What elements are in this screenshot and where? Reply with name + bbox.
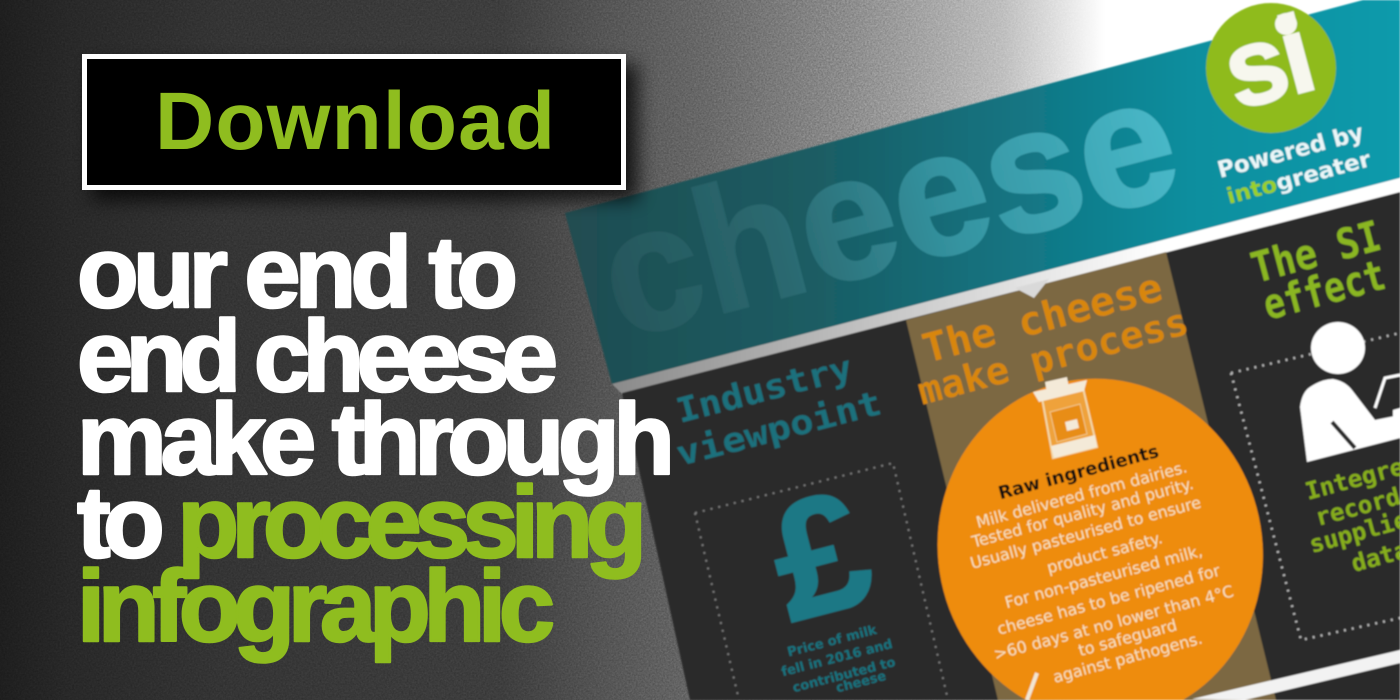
header word: cheese: cheese xyxy=(581,39,1196,376)
title line 4: to processing xyxy=(77,467,647,579)
heading: Industry viewpoint xyxy=(672,348,886,475)
heading: Industry viewpoint: Industry xyxy=(672,348,857,432)
white strip under header xyxy=(612,178,1400,394)
text: milk price note: cheese xyxy=(834,669,888,696)
text: Powered by integreater: intogreater xyxy=(1224,147,1374,210)
title xyxy=(77,217,675,663)
icon: pound sign: £ xyxy=(753,455,888,656)
white lower rule xyxy=(1192,650,1400,700)
download button shadow xyxy=(92,64,638,200)
text: milk price note xyxy=(780,623,897,696)
dotted frame: industry viewpoint xyxy=(695,463,948,700)
text: raw ingredients: against pathogens. xyxy=(1051,629,1204,687)
heading: The cheese make process: make process xyxy=(913,299,1193,414)
text: raw ingredients: Usually pasteurised to ensure xyxy=(968,493,1203,573)
title line 2: end cheese xyxy=(77,301,558,413)
text: raw ingredients: Tested for quality and purity. xyxy=(969,474,1195,552)
title line 5: infographic xyxy=(77,551,555,663)
heading: Industry viewpoint: viewpoint xyxy=(672,383,886,475)
panel: dark content area xyxy=(622,192,1400,700)
button label: Download xyxy=(155,76,555,167)
download button xyxy=(84,56,624,188)
text: raw ingredients: >60 days at no lower than 4°C xyxy=(992,581,1236,664)
text: raw ingredients: cheese has to be ripened for xyxy=(995,561,1222,639)
orange process circle xyxy=(938,379,1263,700)
text: raw ingredients: to safeguard xyxy=(1076,615,1179,660)
logo dot xyxy=(1275,13,1297,35)
title line 3: make through xyxy=(77,384,675,496)
text: raw ingredients: For non-pasteurised milk, xyxy=(1003,541,1204,612)
heading: The cheese make process: The cheese xyxy=(918,265,1167,373)
text: milk price note: contributed to xyxy=(791,655,897,696)
icon: person at laptop xyxy=(1300,322,1400,462)
panel: teal header band xyxy=(565,0,1400,384)
text: milk price note: Price of milk xyxy=(786,623,879,660)
text: raw ingredients: product safety. xyxy=(1045,528,1164,577)
title line 1: our end to xyxy=(77,217,518,329)
subheading: Raw ingredients: Raw ingredients xyxy=(996,441,1161,504)
column notch arrow xyxy=(1015,279,1049,298)
panel: cheese make process column xyxy=(906,252,1276,700)
text: Powered by integreater: Powered by xyxy=(1215,120,1366,184)
text: raw ingredients: Milk delivered from dairies. xyxy=(974,457,1189,532)
icon: milk churn xyxy=(1033,377,1097,458)
text: Powered by integreater xyxy=(1215,120,1374,210)
text: raw ingredients xyxy=(968,441,1236,687)
dotted frame: SI effect xyxy=(1231,333,1400,640)
logo: si circle xyxy=(1206,0,1336,133)
arrow line xyxy=(1027,673,1037,700)
heading: The SI effect xyxy=(1246,211,1390,330)
text: SI effect note xyxy=(1302,438,1400,578)
infographic preview xyxy=(565,0,1400,700)
text: milk price note: fell in 2016 and xyxy=(780,637,894,680)
